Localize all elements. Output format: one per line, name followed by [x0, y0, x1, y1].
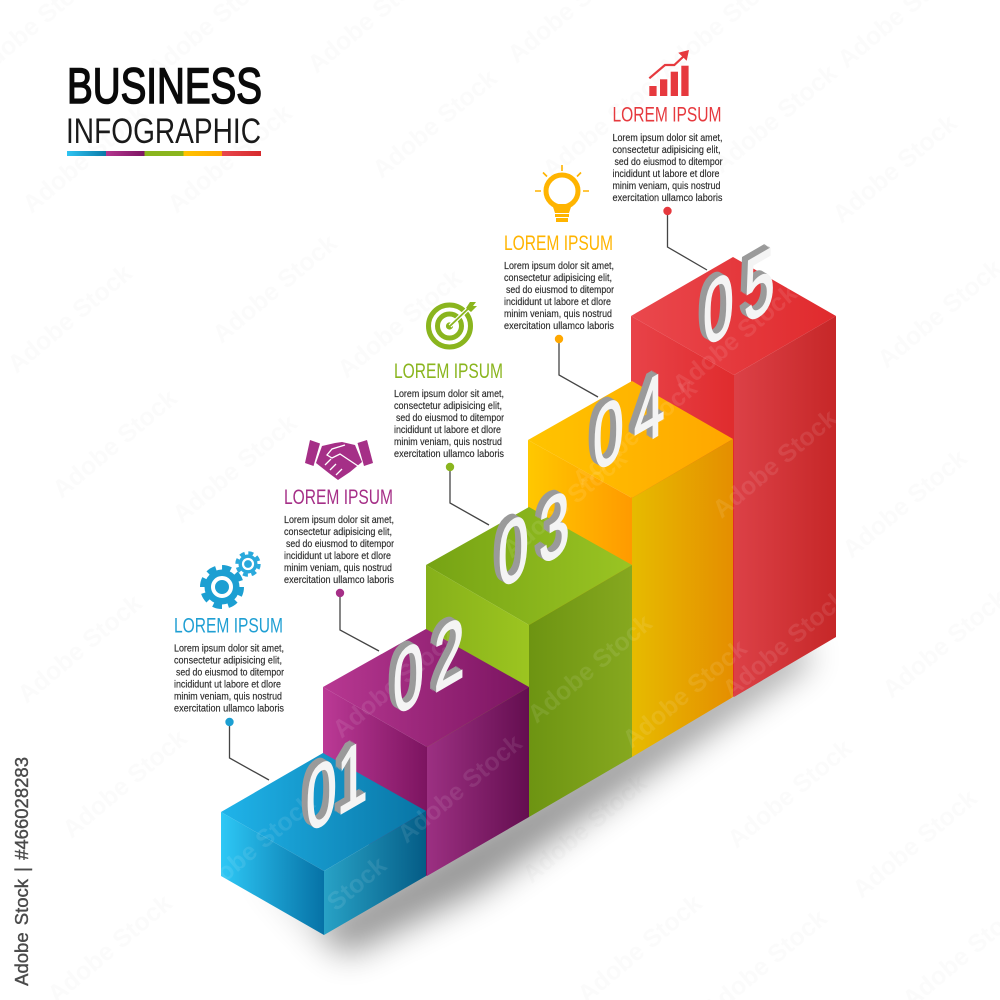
text block: minim veniam, quis nostrud [284, 562, 392, 574]
number 05: 05 [701, 226, 772, 366]
connector line [663, 207, 707, 270]
connector line [336, 589, 379, 651]
number 02: 02 [389, 594, 461, 734]
text block: exercitation ullamco laboris [504, 320, 614, 332]
text block: Lorem ipsum dolor sit amet, [284, 514, 394, 526]
number 05: 05 [702, 227, 774, 367]
watermark: faint stock text on the background: Adobe Stock [12, 589, 147, 709]
number 04: 04 [592, 352, 664, 492]
text block: sed do eiusmod to ditempor [614, 156, 723, 168]
watermark: faint stock text on the background: Adobe Stock [167, 409, 302, 529]
icon: light bulb [535, 165, 589, 222]
ground shadow [250, 640, 810, 955]
text block: incididunt ut labore et dlore [394, 424, 501, 436]
text block: incididunt ut labore et dlore [284, 550, 391, 562]
number 03: 03 [493, 467, 565, 607]
panel: step 2 [284, 440, 394, 651]
number 02: 02 [392, 596, 464, 736]
watermark: faint stock text on the background: Adobe Stock [517, 769, 652, 889]
watermark: faint stock text over the blocks: Stock [322, 851, 392, 916]
heading: LOREM IPSUM [174, 614, 283, 638]
text block: Lorem ipsum dolor sit amet, [394, 388, 504, 400]
watermark: faint stock text over the blocks: Adobe Stock [667, 279, 802, 399]
text block: consectetur adipisicing elit, [284, 526, 392, 538]
watermark: faint stock text on the background: Adobe Stock [162, 99, 297, 219]
text block: sed do eiusmod to ditempor [396, 412, 504, 424]
watermark: faint stock text over the blocks: Adobe Stock [707, 404, 842, 524]
watermark: faint stock text on the background: Adobe Stock [537, 64, 672, 184]
text block [284, 514, 394, 586]
rainbow underline [67, 151, 261, 156]
number 03: 03 [497, 469, 569, 609]
connector line [225, 718, 269, 780]
number 05: 05 [698, 225, 770, 365]
number 02: 02 [388, 594, 460, 734]
heading: LOREM IPSUM [284, 486, 393, 509]
number 01: 01 [306, 719, 368, 853]
heading: business: BUSINESS [67, 58, 262, 114]
text block: consectetur adipisicing elit, [394, 400, 502, 412]
icon: target [428, 302, 477, 347]
number 01: 01 [305, 719, 366, 853]
number 05: 05 [703, 228, 775, 367]
watermark: faint stock text over the blocks: Adobe Stock [717, 584, 852, 704]
text block: incididunt ut labore et dlore [504, 296, 611, 308]
number 04: 04 [591, 351, 662, 491]
text block: incididunt ut labore et dlore [612, 168, 720, 180]
number 02: 02 [387, 593, 459, 733]
text block: sed do eiusmod to ditempor [286, 538, 394, 550]
text block: Lorem ipsum dolor sit amet, [174, 642, 284, 654]
heading: LOREM IPSUM [504, 232, 613, 255]
watermark: faint stock text on the background: Adobe Stock [722, 734, 857, 854]
watermark: faint stock text on the background: Adobe Stock [367, 64, 502, 184]
watermark: faint stock text on the background: Adobe Stock [847, 784, 982, 904]
number 03: 03 [496, 468, 567, 608]
heading: infographic: INFOGRAPHIC [66, 112, 261, 151]
watermark: faint stock text over the blocks: Adobe Stock [327, 624, 462, 744]
block 01 [221, 753, 426, 935]
watermark: faint stock text over the blocks: Adobe Stock [617, 634, 752, 754]
panel: step 5 [612, 50, 723, 270]
number 01: 01 [300, 716, 362, 850]
number 03: 03 [498, 470, 570, 609]
icon: rising chart [649, 50, 689, 96]
watermark: faint stock text on the background: Adobe Stock [57, 724, 192, 844]
block 04 [528, 381, 733, 757]
text block [612, 132, 723, 204]
number 04: 04 [587, 349, 659, 489]
number 03: 03 [492, 466, 564, 606]
watermark: faint stock text on the background: Adobe Stock [2, 259, 137, 379]
panel: step 3 [394, 302, 504, 525]
title [66, 58, 262, 156]
watermark: faint stock text over the blocks: Adobe Stock [497, 444, 632, 564]
icon: handshake [305, 440, 373, 480]
text block: incididunt ut labore et dlore [174, 678, 281, 690]
text block: minim veniam, quis nostrud [612, 180, 721, 192]
text block [174, 642, 284, 714]
text block: minim veniam, quis nostrud [174, 690, 282, 702]
number 05: 05 [699, 225, 771, 365]
number 02: 02 [391, 595, 462, 735]
watermark: faint stock text over the blocks: Adobe Stock [392, 729, 527, 849]
watermark: faint stock text on the background: Adobe Stock [17, 99, 152, 219]
heading: LOREM IPSUM [394, 360, 503, 383]
watermark: faint stock text on the background: Adobe Stock [707, 59, 842, 179]
watermark: faint stock text on the background: Adobe Stock [837, 444, 972, 564]
number 04: 04 [593, 353, 665, 492]
number 01: 01 [304, 718, 365, 852]
watermark: faint stock text on the background: Adobe Stock [47, 384, 182, 504]
text block: Lorem ipsum dolor sit amet, [612, 132, 722, 144]
text block: minim veniam, quis nostrud [504, 308, 612, 320]
watermark: faint stock text on the background: Adobe Stock [827, 109, 962, 229]
number 04: 04 [589, 350, 661, 490]
number 04: 04 [588, 350, 660, 490]
number 03: 03 [494, 467, 566, 607]
watermark: faint stock text over the blocks: Adobe Stock [567, 374, 702, 494]
side credit text: Adobe Stock | #466028283 [11, 757, 32, 986]
watermark: faint stock text over the blocks: Adobe Stock [185, 789, 320, 909]
panel: step 1 [174, 553, 284, 780]
text block: sed do eiusmod to ditempor [176, 666, 284, 678]
text block: consectetur adipisicing elit, [504, 272, 612, 284]
bar chart: isometric staircase [221, 257, 836, 935]
text block [504, 260, 614, 332]
connector line [446, 463, 489, 525]
text block: consectetur adipisicing elit, [174, 654, 282, 666]
text block: minim veniam, quis nostrud [394, 436, 502, 448]
connector line [555, 335, 598, 397]
text block: exercitation ullamco laboris [394, 448, 504, 460]
text block [394, 388, 504, 460]
block 05 [631, 257, 836, 697]
number 05: 05 [697, 224, 769, 364]
watermark: faint stock text over the blocks: Adobe Stock [522, 609, 657, 729]
number 02: 02 [393, 597, 465, 736]
heading: LOREM IPSUM [612, 104, 722, 126]
number 01: 01 [301, 717, 363, 851]
text block: exercitation ullamco laboris [612, 192, 722, 204]
watermark: faint stock text on the background: Adobe Stock [207, 229, 342, 349]
text block: exercitation ullamco laboris [174, 702, 284, 714]
block 02 [323, 629, 529, 876]
icon: gears [202, 553, 259, 606]
panel: step 4 [504, 165, 614, 397]
text block: consectetur adipisicing elit, [612, 144, 720, 156]
text block: exercitation ullamco laboris [284, 574, 394, 586]
text block: Lorem ipsum dolor sit amet, [504, 260, 614, 272]
text block: sed do eiusmod to ditempor [506, 284, 614, 296]
watermark: faint stock text on the background: Adobe Stock [332, 264, 467, 384]
block 03 [426, 507, 632, 817]
watermark: faint stock text over the blocks [185, 279, 852, 916]
number 01: 01 [302, 717, 364, 851]
